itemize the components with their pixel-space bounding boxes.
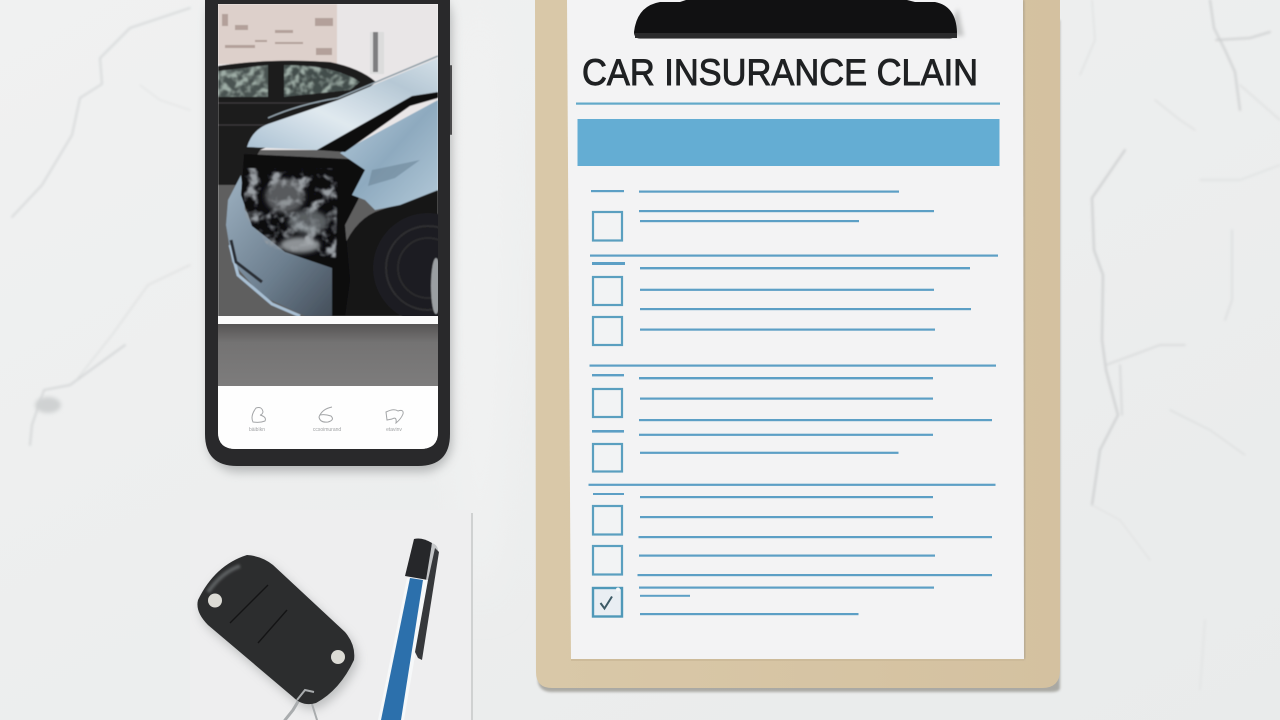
- checklist section four: [588, 484, 996, 616]
- checkbox: [593, 389, 622, 417]
- panel: note paper: [190, 510, 473, 720]
- gray strip: [218, 324, 438, 386]
- wheel: [344, 190, 438, 316]
- app navigation bar: [218, 406, 438, 449]
- icon: car key fob: [197, 555, 357, 720]
- checklist section three: [590, 364, 996, 472]
- checkbox: [593, 212, 622, 240]
- checked checkbox: [593, 588, 622, 616]
- paper sheet: [567, 0, 1025, 661]
- panel: clipboard: [535, 0, 1060, 692]
- nav item two: [313, 407, 341, 433]
- checkbox: [593, 277, 622, 305]
- nav item one: [249, 408, 265, 433]
- background black car: [218, 61, 376, 185]
- checkbox: [593, 444, 622, 472]
- checkbox: [593, 506, 622, 534]
- checkbox: [593, 546, 622, 574]
- photo: damaged car: [218, 4, 438, 316]
- checkbox: [593, 317, 622, 345]
- nav item three: [386, 410, 403, 433]
- icon: pen: [378, 538, 439, 720]
- phone screen: [218, 4, 438, 449]
- checklist section two: [590, 254, 998, 345]
- hood: [247, 58, 438, 150]
- nav item two: ccsoimurand: [313, 427, 341, 433]
- fender: [340, 100, 438, 210]
- nav item three: etavinv: [386, 427, 402, 433]
- panel: smartphone: [205, 0, 483, 472]
- title underline: [576, 102, 1000, 105]
- title: CAR INSURANCE CLAIN: [582, 52, 978, 93]
- white caption strip: [218, 316, 438, 324]
- crushed engine: [241, 154, 368, 316]
- blue header banner: [578, 119, 1000, 166]
- clipboard clip: [634, 0, 964, 39]
- hood seam: [317, 92, 438, 152]
- nav item one: bàibìkn: [249, 427, 265, 433]
- clipboard board: [535, 0, 1060, 688]
- icon: key ring: [285, 700, 317, 720]
- bumper: [226, 175, 345, 316]
- checklist section one: [591, 190, 934, 240]
